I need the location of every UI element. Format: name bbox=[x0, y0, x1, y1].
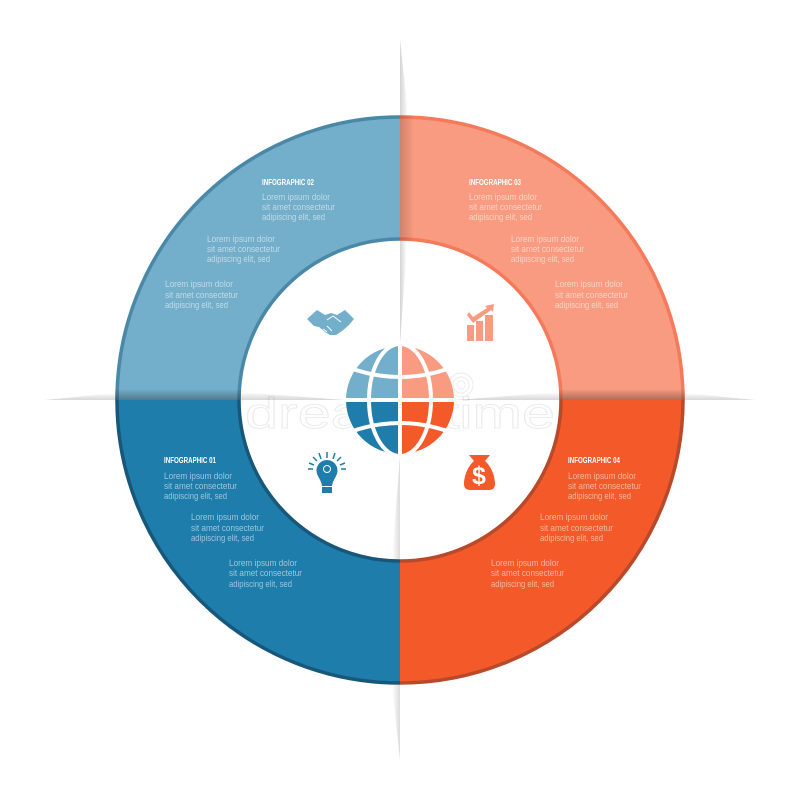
fold shadows bbox=[45, 40, 755, 760]
panel: infographic 03: adipiscing elit, sed bbox=[511, 254, 574, 264]
panel: infographic 03: adipiscing elit, sed bbox=[555, 300, 618, 310]
ring segment: top right bbox=[400, 117, 683, 400]
watermark: dreamstime bbox=[245, 389, 555, 438]
panel: infographic 03: Lorem ipsum dolor bbox=[555, 279, 623, 289]
panel: infographic 04: adipiscing elit, sed bbox=[491, 579, 554, 589]
panel: infographic 02: sit amet consectetur bbox=[165, 290, 238, 300]
panel: infographic 04 bbox=[491, 456, 641, 589]
panel: infographic 01: sit amet consectetur bbox=[164, 481, 237, 491]
panel: infographic 01 bbox=[164, 456, 302, 589]
panel: infographic 03: sit amet consectetur bbox=[469, 202, 542, 212]
panel: infographic 02: Lorem ipsum dolor bbox=[165, 279, 233, 289]
panel: infographic 02: adipiscing elit, sed bbox=[207, 254, 270, 264]
ring outlines bbox=[117, 117, 683, 683]
panel: infographic 01: Lorem ipsum dolor bbox=[229, 558, 297, 568]
icon: globe bbox=[346, 344, 454, 456]
ring segment: top left bbox=[117, 117, 400, 400]
panel: infographic 01: adipiscing elit, sed bbox=[229, 579, 292, 589]
panel: infographic 04: INFOGRAPHIC 04 bbox=[568, 456, 620, 465]
panel: infographic 04: Lorem ipsum dolor bbox=[491, 558, 559, 568]
panel: infographic 02: adipiscing elit, sed bbox=[165, 300, 228, 310]
ring segment: bottom left bbox=[117, 400, 400, 683]
panel: infographic 03 bbox=[469, 178, 628, 310]
panel: infographic 01: Lorem ipsum dolor bbox=[164, 471, 232, 481]
panel: infographic 01: sit amet consectetur bbox=[191, 523, 264, 533]
panel: infographic 03: Lorem ipsum dolor bbox=[469, 192, 537, 202]
panel: infographic 01: Lorem ipsum dolor bbox=[191, 512, 259, 522]
panel: infographic 02: Lorem ipsum dolor bbox=[262, 192, 330, 202]
panel: infographic 04: adipiscing elit, sed bbox=[540, 533, 603, 543]
panel: infographic 04: sit amet consectetur bbox=[540, 523, 613, 533]
panel: infographic 01: adipiscing elit, sed bbox=[191, 533, 254, 543]
panel: infographic 03: adipiscing elit, sed bbox=[469, 212, 532, 222]
panel: infographic 04: Lorem ipsum dolor bbox=[540, 512, 608, 522]
panel: infographic 01: adipiscing elit, sed bbox=[164, 491, 227, 501]
panel: infographic 01: sit amet consectetur bbox=[229, 568, 302, 578]
panel: infographic 03: sit amet consectetur bbox=[555, 290, 628, 300]
watermark bbox=[245, 373, 555, 438]
panel: infographic 02: INFOGRAPHIC 02 bbox=[262, 178, 314, 187]
panel: infographic 04: sit amet consectetur bbox=[491, 568, 564, 578]
ring segment: bottom right bbox=[400, 400, 683, 683]
icon: growth chart bbox=[467, 304, 494, 341]
panel: infographic 02: sit amet consectetur bbox=[207, 244, 280, 254]
panel: infographic 02: sit amet consectetur bbox=[262, 202, 335, 212]
icon: money bag bbox=[464, 455, 495, 490]
panel: infographic 03: Lorem ipsum dolor bbox=[511, 234, 579, 244]
panel: infographic 03: sit amet consectetur bbox=[511, 244, 584, 254]
panel: infographic 04: sit amet consectetur bbox=[568, 481, 641, 491]
panel: infographic 04: adipiscing elit, sed bbox=[568, 491, 631, 501]
panel: infographic 03: INFOGRAPHIC 03 bbox=[469, 178, 521, 187]
panel: infographic 02 bbox=[165, 178, 335, 310]
icon: light bulb bbox=[308, 452, 346, 493]
icon: handshake bbox=[307, 310, 354, 335]
panel: infographic 02: adipiscing elit, sed bbox=[262, 212, 325, 222]
icon: money bag: $ bbox=[472, 462, 486, 490]
panel: infographic 01: INFOGRAPHIC 01 bbox=[164, 456, 216, 465]
panel: infographic 02: Lorem ipsum dolor bbox=[207, 234, 275, 244]
panel: infographic 04: Lorem ipsum dolor bbox=[568, 471, 636, 481]
